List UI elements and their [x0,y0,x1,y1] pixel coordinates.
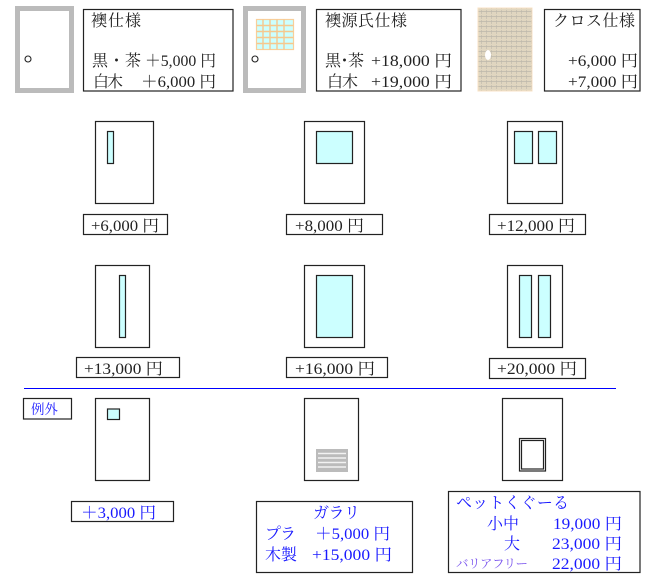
price label: 13,000: +13,000 円 [84,360,163,378]
door: pet door [502,398,562,480]
price label: 3,000 [72,502,174,522]
price label: 20,000: +20,000 円 [497,360,577,378]
price box: pet door: 19,000 円 [553,515,622,533]
price box: pet door: 小中 [487,515,519,533]
price label: 20,000 [490,358,586,378]
price box: louver: ＋5,000 円 [315,525,390,543]
price box: cloth finish: +6,000 円 [568,52,638,70]
price label: 6,000: +6,000 円 [91,217,159,235]
price label: 12,000 [490,214,586,235]
door: double short windows [508,122,562,204]
price box: pet door: 23,000 円 [552,535,622,553]
door: cloth finish [478,8,532,91]
price label: 3,000: ＋3,000 円 [81,504,156,522]
price box: louver: プラ [265,525,296,543]
price box: genji finish: +19,000 円 [371,73,452,91]
price label: 16,000: +16,000 円 [295,360,375,378]
price box: genji finish: 白木 [327,73,358,91]
price box: genji finish: 襖源氏仕様 [325,12,407,30]
price box: genji finish: 黒･茶 [325,52,364,70]
exceptions heading [24,398,72,419]
door: double tall windows [508,266,562,348]
door: wide short window [304,122,364,204]
door: small square window [96,398,150,480]
price box: louver [256,502,412,572]
price box: cloth finish [544,10,640,91]
price box: louver: ガラリ [313,505,360,522]
price label: 6,000 [84,214,168,235]
price box: plain finish [84,10,233,91]
price label: 16,000 [286,358,388,378]
door: plain finish [18,8,72,90]
price box: pet door: 22,000 円 [552,555,622,573]
price box: genji finish [316,10,461,91]
price label: 8,000: +8,000 円 [295,217,364,235]
price label: 12,000: +12,000 円 [497,217,575,235]
price box: pet door: 大 [504,535,520,553]
price box: louver: +15,000 円 [312,546,392,564]
exceptions heading: 例外 [31,402,58,417]
door: genji paper window finish [246,8,304,90]
price box: pet door: ペットくぐーる [456,495,569,512]
price box: pet door [448,492,640,573]
price box: plain finish: 黒・茶 [92,52,141,70]
price box: plain finish: ＋5,000 円 [145,52,216,70]
door: narrow tall window [96,266,150,348]
price box: plain finish: ＋6,000 円 [141,73,216,91]
price box: louver: 木製 [265,545,297,564]
price box: plain finish: 白木 [93,73,123,91]
price box: genji finish: +18,000 円 [371,52,452,70]
price box: plain finish: 襖仕様 [91,12,141,30]
door: wide tall window [304,266,364,348]
price box: cloth finish: +7,000 円 [568,73,638,91]
price box: cloth finish: クロス仕様 [553,12,635,30]
door: louver vent [304,398,358,480]
door: narrow short window [96,122,154,204]
price label: 13,000 [76,358,180,378]
price label: 8,000 [286,214,382,235]
price box: pet door: バリアフリー [456,557,528,571]
